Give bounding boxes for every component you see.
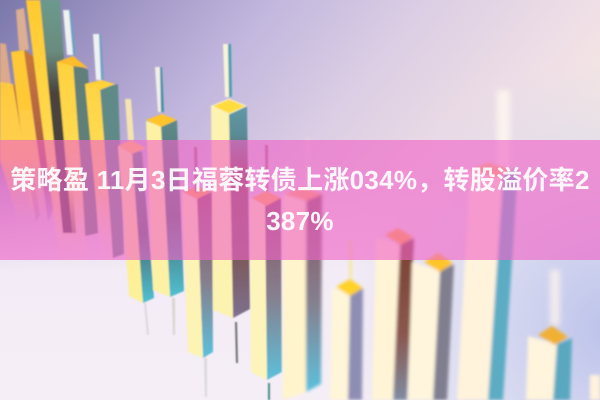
wicks, white — [63, 10, 76, 55]
right bar cluster — [283, 138, 600, 400]
bar H — [197, 192, 213, 358]
title: 策略盈 11月3日福蓉转债上涨034%，转股溢价率2 — [10, 165, 590, 195]
bar O — [488, 168, 518, 400]
left bar cluster — [0, 0, 282, 400]
title — [10, 165, 590, 236]
soft pale wicks — [497, 90, 560, 326]
bar D — [73, 62, 98, 236]
bar J — [265, 198, 282, 380]
bar Q at right edge — [590, 375, 600, 400]
bar M — [393, 238, 414, 400]
bar F — [128, 148, 154, 303]
wicks in the band — [194, 147, 198, 192]
bar I — [229, 106, 250, 318]
wicks below the bars — [144, 303, 149, 335]
pink title band — [0, 140, 600, 260]
bar E — [100, 84, 124, 258]
bar B — [11, 50, 48, 222]
bar K — [306, 193, 322, 392]
bar L — [349, 240, 352, 280]
bar A — [0, 82, 36, 222]
title: 387% — [266, 206, 334, 236]
bar C — [26, 0, 78, 265]
wicks, orange — [16, 8, 29, 50]
bar N — [433, 264, 454, 400]
bar G — [161, 120, 184, 297]
bar P — [553, 338, 572, 400]
